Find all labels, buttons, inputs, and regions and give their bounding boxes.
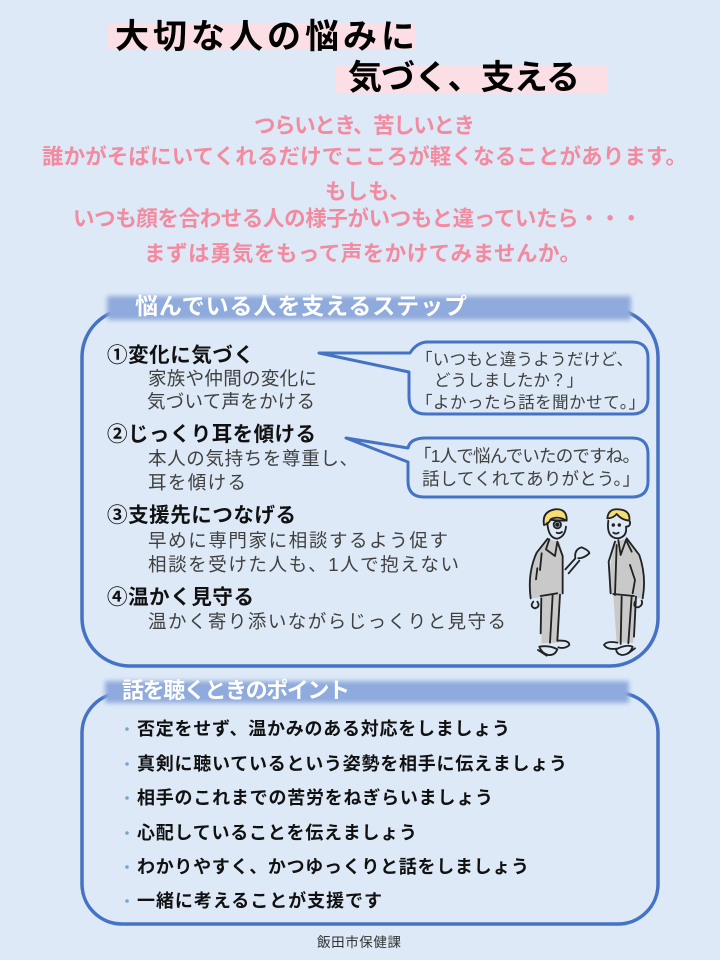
heading: listening points bbox=[105, 678, 629, 703]
intro message: いつも顔を合わせる人の様子がいつもと違っていたら・・・ bbox=[73, 206, 642, 231]
step 2: ②じっくり耳を傾ける bbox=[107, 423, 316, 446]
step 2: 本人の気持ちを尊重し、 bbox=[148, 448, 358, 469]
point list: 相手のこれまでの苦労をねぎらいましょう bbox=[137, 787, 493, 808]
callout: step 1 speech bubble: 「よかったら話を聞かせて。」 bbox=[416, 393, 645, 412]
step 2 bbox=[107, 423, 358, 493]
step 1: 気づいて声をかける bbox=[147, 391, 315, 412]
point list: 一緒に考えることが支援です bbox=[137, 890, 382, 911]
heading: steps bbox=[107, 293, 631, 320]
step 4: 温かく寄り添いながらじっくりと見守る bbox=[148, 611, 506, 632]
intro message: つらいとき、苦しいとき bbox=[254, 114, 475, 138]
illustration: two people talking bbox=[530, 509, 644, 656]
callout: step 2 speech bubble: 話してくれてありがとう。」 bbox=[422, 469, 640, 489]
step 3: 早めに専門家に相談するよう促す bbox=[148, 530, 448, 551]
footer credit: 飯田市保健課 bbox=[317, 935, 402, 950]
title bbox=[108, 18, 607, 97]
step 3: ③支援先につなげる bbox=[107, 504, 296, 527]
callout: step 2 speech bubble bbox=[346, 438, 648, 497]
panel: steps bbox=[82, 293, 658, 666]
point list: 心配していることを伝えましょう bbox=[137, 823, 417, 843]
callout: step 1 speech bubble bbox=[319, 342, 648, 414]
heading: listening points: 話を聴くときのポイント bbox=[122, 678, 350, 703]
step 2: 耳を傾ける bbox=[148, 472, 246, 493]
step 3 bbox=[107, 504, 459, 575]
callout: step 1 speech bubble: 「いつもと違うようだけど、 bbox=[416, 350, 633, 369]
intro message: もしも、 bbox=[325, 180, 410, 204]
point list: 否定をせず、温かみのある対応をしましょう bbox=[137, 719, 510, 739]
heading: steps: 悩んでいる人を支えるステップ bbox=[135, 293, 467, 319]
intro message: 誰かがそばにいてくれるだけでこころが軽くなることがあります。 bbox=[42, 144, 687, 169]
step 1 bbox=[107, 344, 317, 412]
person left bbox=[530, 509, 589, 656]
step 1: 家族や仲間の変化に bbox=[148, 368, 317, 389]
step 4 bbox=[107, 586, 506, 632]
person right bbox=[604, 509, 644, 655]
step 4: ④温かく見守る bbox=[107, 586, 254, 609]
step 3: 相談を受けた人も、1人で抱えない bbox=[148, 554, 459, 575]
intro message: まずは勇気をもって声をかけてみませんか。 bbox=[144, 242, 581, 266]
callout: step 2 speech bubble: 「1人で悩んでいたのですね。 bbox=[414, 446, 640, 466]
callout: step 1 speech bubble: どうしましたか？」 bbox=[434, 371, 583, 390]
intro message bbox=[42, 114, 687, 266]
point list bbox=[125, 719, 567, 911]
panel: listening points bbox=[82, 678, 658, 924]
title: 気づく、支える bbox=[348, 59, 580, 97]
point list: わかりやすく、かつゆっくりと話をしましょう bbox=[137, 857, 529, 877]
title: 大切な人の悩みに bbox=[115, 18, 415, 56]
point list: 真剣に聴いているという姿勢を相手に伝えましょう bbox=[137, 754, 567, 774]
step 1: ①変化に気づく bbox=[107, 344, 254, 367]
